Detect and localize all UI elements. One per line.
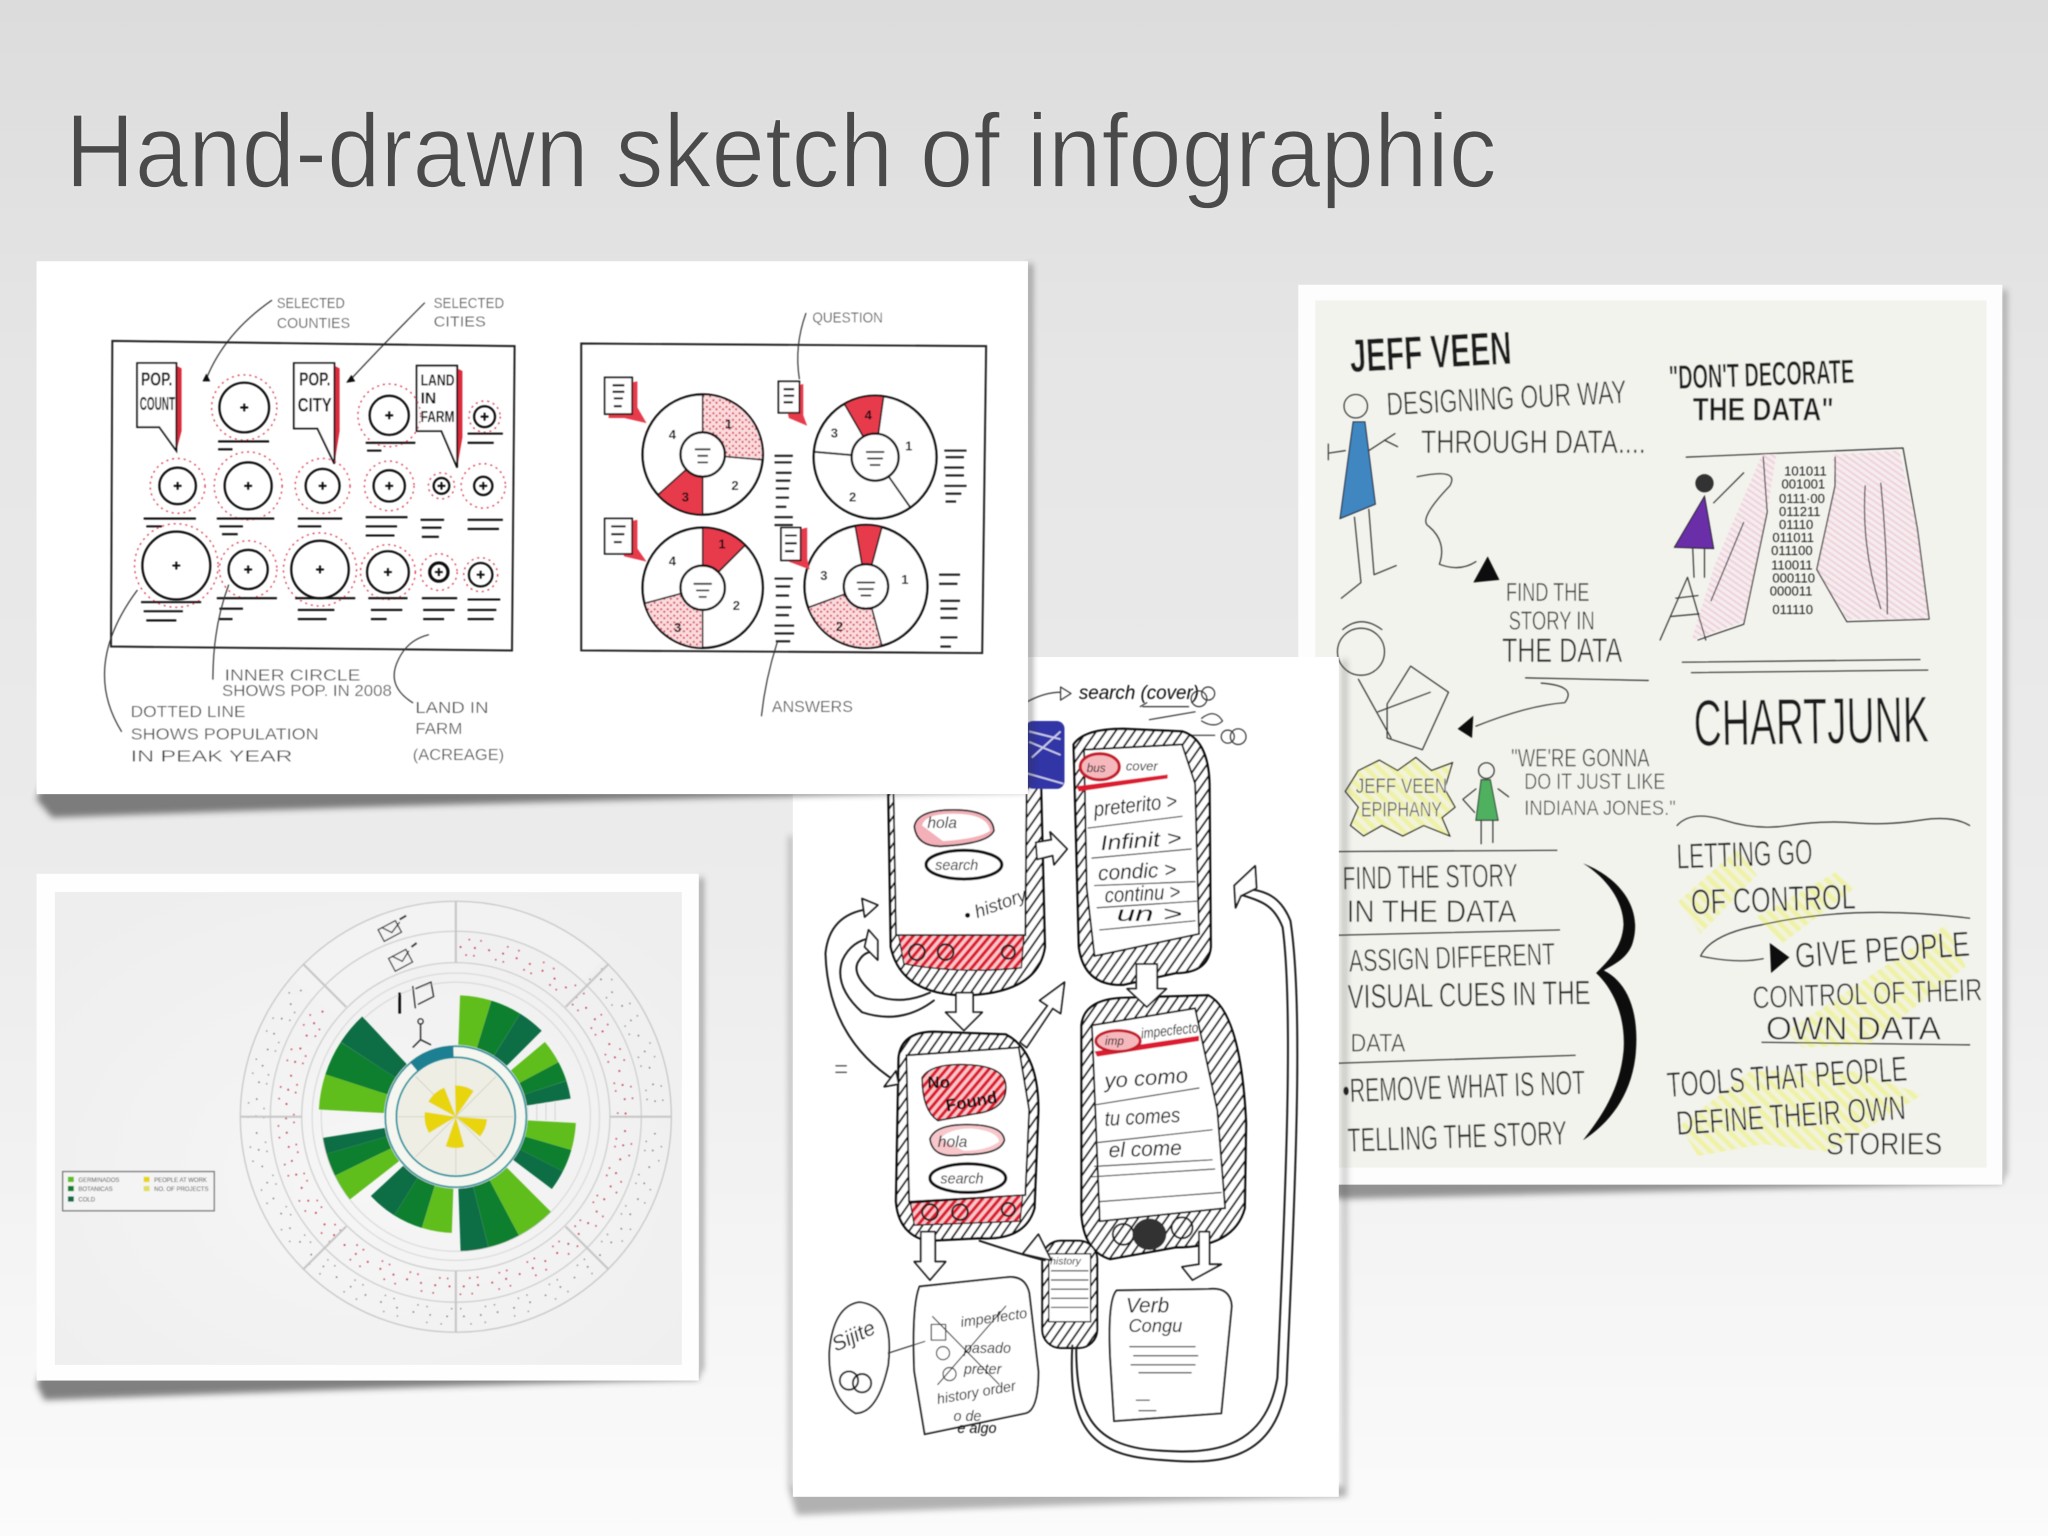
phone: no found screen: No	[927, 1073, 950, 1092]
flags: population labels: FARM	[421, 409, 455, 426]
chart: donut question one: 2	[731, 478, 739, 493]
chart: donut question two: 1	[905, 439, 912, 454]
chart: donut question two: 3	[831, 426, 838, 441]
chart: centre yellow petals	[398, 1059, 514, 1175]
arrow: big return loop	[1072, 866, 1297, 1462]
text: tools that people	[1666, 1049, 1942, 1162]
chart: donut question four	[805, 525, 927, 648]
list: find the story, assign cues, remove	[1342, 856, 1591, 1160]
phone: top left home screen: hola	[927, 815, 957, 832]
text: give people control	[1752, 925, 1983, 1047]
chart: donut question two: 4	[865, 407, 873, 422]
flags: question boxes	[605, 377, 810, 569]
icons: envelopes flag and figure	[378, 916, 434, 1048]
arrows: left side curved loop	[825, 899, 934, 1087]
phone: top left home screen: • history	[961, 883, 1031, 926]
quote: Indiana Jones	[1511, 746, 1676, 820]
quote: Indiana Jones: "WE'RE GONNA	[1511, 746, 1650, 773]
text: letting go of control: LETTING GO	[1676, 833, 1813, 877]
arrow: history to phone	[980, 1234, 1051, 1260]
phone: no found screen: hola	[938, 1134, 968, 1151]
box: settings menu: imperfecto	[960, 1306, 1028, 1331]
phone: no found screen: Found	[944, 1088, 999, 1115]
box: settings menu: pasado	[963, 1341, 1011, 1357]
annotation: inner circle	[213, 585, 392, 700]
list: find the story, assign cues, remove: TELLING THE STORY	[1347, 1114, 1567, 1160]
flags: population labels: IN	[421, 391, 436, 408]
text: designing our way: DESIGNING OUR WAY	[1386, 373, 1628, 422]
chart: donut question three: 1	[718, 537, 726, 552]
box: settings menu: history order	[936, 1378, 1018, 1408]
figure: person in blue dress	[1328, 394, 1398, 598]
annotation: selected cities: SELECTED	[434, 295, 504, 312]
annotation: land in farm: LAND IN	[415, 700, 488, 717]
callout: Jeff Veen epiphany burst: EPIPHANY	[1361, 798, 1442, 821]
text: find the story in the data: THE DATA	[1502, 632, 1622, 670]
phone: top left home screen: search	[935, 858, 978, 874]
illustration: curtains over data	[1686, 448, 1929, 640]
flags: population labels	[137, 363, 462, 468]
text: tools that people: TOOLS THAT PEOPLE	[1666, 1049, 1908, 1105]
legend: NO. OF PROJECTS	[154, 1187, 208, 1193]
phone: imperfecto conjugation: el come	[1108, 1137, 1182, 1162]
phone: imperfecto conjugation: tu comes	[1104, 1104, 1181, 1131]
annotation: inner circle: INNER CIRCLE	[225, 667, 360, 684]
text: designing our way: THROUGH DATA....	[1421, 423, 1646, 460]
list: find the story, assign cues, remove: DATA	[1351, 1030, 1406, 1057]
arrow: give people	[1701, 912, 1970, 973]
text: tools that people: STORIES	[1826, 1127, 1942, 1162]
text: letting go of control	[1676, 833, 1856, 922]
title: Hand-drawn sketch of infographic	[65, 93, 1497, 210]
chart: proportional circles	[142, 383, 495, 600]
annotation: selected cities	[346, 295, 504, 383]
circle: sijete note: Sijite	[828, 1316, 879, 1356]
chart: donut question three: 4	[669, 554, 677, 569]
chart: donut question one: 4	[669, 427, 677, 442]
list: find the story, assign cues, remove: •REMOVE WHAT IS NOT	[1342, 1064, 1586, 1110]
legend: BOTANICAS	[78, 1187, 113, 1193]
callout: Jeff Veen epiphany burst: JEFF VEEN	[1356, 775, 1447, 798]
frame: left sketch	[111, 341, 515, 650]
phone: no found screen: search	[940, 1171, 984, 1187]
illustration: curtains over data: 001001	[1782, 476, 1825, 491]
box: settings menu: o de	[953, 1409, 981, 1425]
list: find the story, assign cues, remove: VISUAL CUES IN THE	[1347, 974, 1591, 1016]
legend: GERMINADOS	[78, 1178, 119, 1184]
phone: imperfecto conjugation	[1081, 995, 1246, 1259]
phone: preterito menu: bus	[1087, 762, 1106, 775]
figure: person in purple on ladder	[1660, 473, 1744, 640]
quote: Indiana Jones: DO IT JUST LIKE	[1524, 769, 1665, 794]
figure: person with book	[1337, 622, 1448, 750]
divider rules	[1682, 660, 1928, 673]
annotation: selected counties: SELECTED	[277, 295, 345, 312]
list: find the story, assign cues, remove: ASSIGN DIFFERENT	[1348, 937, 1556, 979]
illustration: curtains over data: 011100	[1771, 543, 1813, 558]
illustration: curtains over data: 0111·00	[1779, 491, 1825, 506]
illustration: curtains over data: 01110	[1779, 517, 1813, 532]
text: give people control: OWN DATA	[1766, 1010, 1941, 1047]
callout: Jeff Veen epiphany burst	[1345, 758, 1455, 836]
chart: donut question four: 2	[836, 619, 843, 634]
box: settings menu	[914, 1277, 1038, 1437]
flags: population labels: POP.	[299, 368, 330, 389]
annotation: answers: ANSWERS	[772, 699, 853, 716]
chart: donut question two: 2	[849, 490, 856, 505]
chart: donut question three: 3	[674, 620, 681, 635]
highlights: yellow marker	[1678, 849, 1966, 1156]
box: verb conjugation: Congu	[1128, 1315, 1182, 1336]
annotation: selected counties: COUNTIES	[277, 315, 350, 332]
annotation: dotted line	[105, 590, 319, 765]
phone: top left home screen	[888, 784, 1045, 995]
wavy rule	[1677, 816, 1970, 827]
annotation: inner circle: SHOWS POP. IN 2008	[222, 683, 392, 700]
chart: donut question one	[643, 394, 763, 515]
chart: outer dotted rings	[195, 855, 717, 1378]
panel: Jeff Veen notes sketch	[1298, 285, 2006, 1199]
chart: donut question one: 1	[725, 416, 732, 431]
flags: population labels: POP.	[141, 368, 172, 389]
phone: imperfecto conjugation: yo como	[1102, 1064, 1189, 1093]
annotation: question	[798, 310, 883, 379]
text: letting go of control: OF CONTROL	[1690, 878, 1856, 922]
figure: person in green dress	[1463, 763, 1509, 844]
illustration: curtains over data: 000011	[1770, 584, 1812, 599]
circle: sijete note	[828, 1302, 925, 1413]
box: settings menu: preter	[963, 1362, 1003, 1378]
flags: population labels: CITY	[298, 394, 332, 416]
chart: donut question one: 3	[682, 490, 689, 505]
chart: donut question four: 1	[901, 572, 908, 587]
text: don't decorate the data: "DON'T DECORATE	[1668, 353, 1855, 397]
annotation: question: QUESTION	[812, 310, 883, 327]
text: find the story in the data: STORY IN	[1509, 606, 1595, 636]
list: find the story, assign cues, remove: IN THE DATA	[1347, 894, 1516, 929]
chart: donut question three	[643, 528, 763, 648]
illustration: curtains over data: 011211	[1779, 504, 1821, 519]
box: verb conjugation: Verb	[1126, 1295, 1169, 1318]
legend	[63, 1172, 214, 1211]
text: tools that people: DEFINE THEIR OWN	[1675, 1089, 1907, 1143]
annotation: dotted line: IN PEAK YEAR	[131, 748, 293, 765]
chart: centre teal ring	[364, 1025, 548, 1209]
text: designing our way	[1386, 373, 1646, 460]
phone: preterito menu: continu >	[1104, 881, 1181, 908]
box: settings menu: e algo	[957, 1421, 997, 1437]
labels: circle captions	[141, 434, 503, 620]
illustration: curtains over data: 011011	[1772, 530, 1814, 545]
legend: COLD	[78, 1198, 96, 1204]
icon: blue scribble device	[1025, 721, 1064, 789]
chart: donut question four: 3	[820, 568, 828, 583]
ring segment separators	[240, 901, 671, 1332]
annotation: selected cities: CITIES	[434, 314, 486, 331]
chart: donut question two	[814, 396, 936, 519]
phone: preterito menu: preterito >	[1092, 790, 1178, 821]
text: find the story in the data: FIND THE	[1506, 577, 1590, 607]
box: verb conjugation	[1110, 1289, 1232, 1421]
panel: radial green diagram	[37, 855, 717, 1400]
icon: large brace	[1583, 863, 1636, 1140]
chart: green wedges	[310, 971, 602, 1263]
frame: right sketch	[581, 344, 986, 653]
chart: donut question three: 2	[733, 598, 740, 613]
phone: small history list	[1042, 1241, 1097, 1348]
chart: circle centre marks	[172, 404, 488, 579]
gap stripes between wedge groups	[388, 1095, 555, 1130]
phone: imperfecto conjugation: imp	[1105, 1035, 1124, 1048]
phone: preterito menu	[1074, 729, 1211, 985]
text: don't decorate the data: THE DATA"	[1693, 391, 1834, 428]
panel: county and city sketch	[37, 261, 1032, 818]
phone: preterito menu: condic >	[1098, 858, 1177, 885]
heading: Jeff Veen: JEFF VEEN	[1348, 321, 1513, 382]
arrow: to epiphany	[1458, 678, 1648, 738]
illustration: curtains over data: 110011	[1771, 557, 1813, 572]
annotation: answers	[761, 643, 853, 716]
illustration: curtains over data: 000110	[1772, 571, 1815, 586]
panel: phone interface sketch	[789, 657, 1347, 1515]
arrow: squiggle to find the story	[1417, 474, 1499, 583]
chart: dotted peak population rings	[135, 375, 505, 607]
list: find the story, assign cues, remove: FIND THE STORY	[1342, 856, 1518, 896]
arrows: block flow arrows	[914, 832, 1221, 1280]
lists: answer bars	[775, 451, 967, 647]
annotation: land in farm: (ACREAGE)	[413, 747, 504, 764]
phone: preterito menu: un >	[1117, 903, 1182, 926]
annotation: land in farm: FARM	[415, 721, 462, 738]
illustration: curtains over data: 101011	[1784, 463, 1827, 478]
annotation: dotted line: SHOWS POPULATION	[131, 726, 319, 743]
quote: Indiana Jones: INDIANA JONES."	[1524, 797, 1676, 820]
phone: preterito menu: Infinit >	[1100, 827, 1182, 855]
phone: small history list: history	[1050, 1256, 1082, 1267]
flags: population labels: LAND	[421, 372, 455, 389]
phone: imperfecto conjugation: impecfecto	[1140, 1020, 1199, 1042]
flags: population labels: COUNT	[140, 393, 175, 414]
annotation: land in farm	[394, 635, 504, 764]
text: don't decorate the data	[1668, 353, 1855, 428]
rules	[1339, 850, 1575, 1063]
illustration: curtains over data: 011110	[1772, 602, 1813, 617]
text: find the story in the data	[1502, 577, 1622, 670]
annotation: dotted line: DOTTED LINE	[131, 704, 246, 721]
legend: PEOPLE AT WORK	[154, 1178, 207, 1184]
text: give people control: GIVE PEOPLE	[1794, 925, 1971, 976]
annotation: selected counties	[202, 295, 350, 381]
phone: no found screen	[896, 1032, 1038, 1241]
label: search cover: search (cover)	[1079, 682, 1199, 704]
phone: preterito menu: cover	[1126, 759, 1158, 774]
label: search cover	[1028, 682, 1246, 744]
